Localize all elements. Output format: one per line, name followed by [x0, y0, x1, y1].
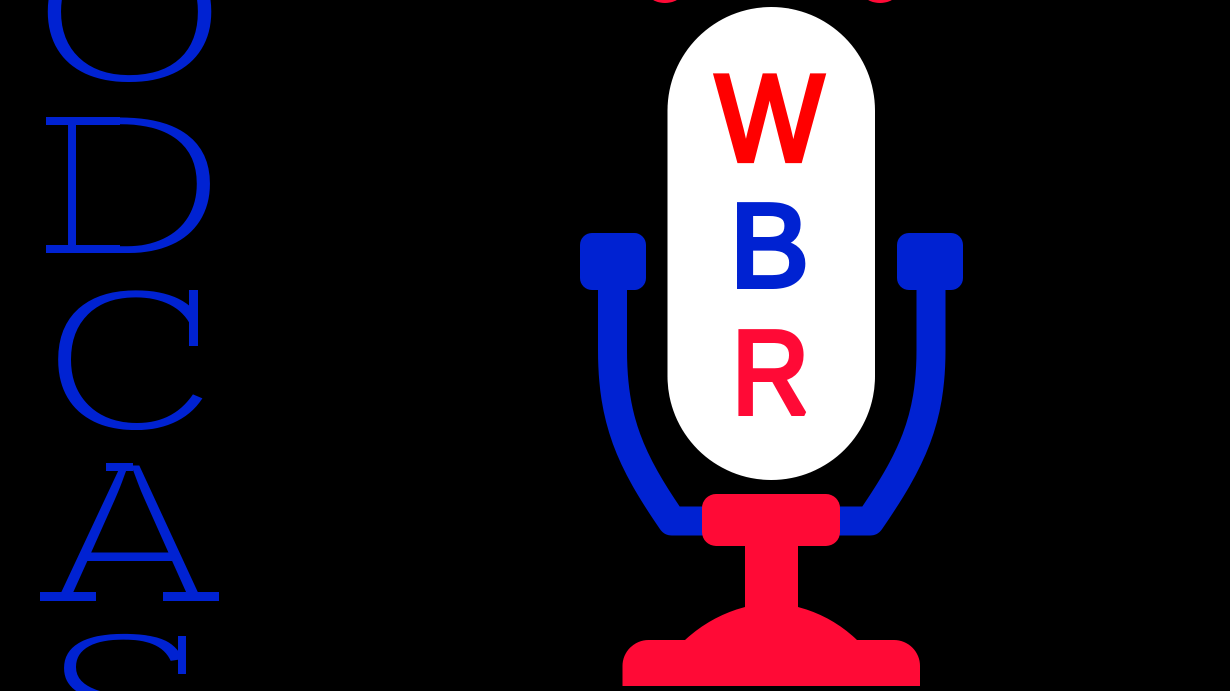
microphone illustration: [580, 0, 963, 686]
letter B: B: [730, 180, 809, 312]
microphone holder arms: [612, 285, 931, 521]
letter D: D: [41, 67, 228, 302]
icon: top red arcs: [640, 0, 905, 3]
holder clip left: [580, 233, 646, 290]
letter A: A: [49, 415, 210, 650]
letter R: R: [732, 306, 809, 439]
vertical stacked word: podcast: [30, 0, 229, 691]
holder clip right: [897, 233, 963, 290]
letter W: W: [716, 51, 824, 187]
microphone capsule: [668, 7, 875, 480]
letter C: C: [40, 242, 219, 477]
microphone stand: [622, 494, 920, 686]
